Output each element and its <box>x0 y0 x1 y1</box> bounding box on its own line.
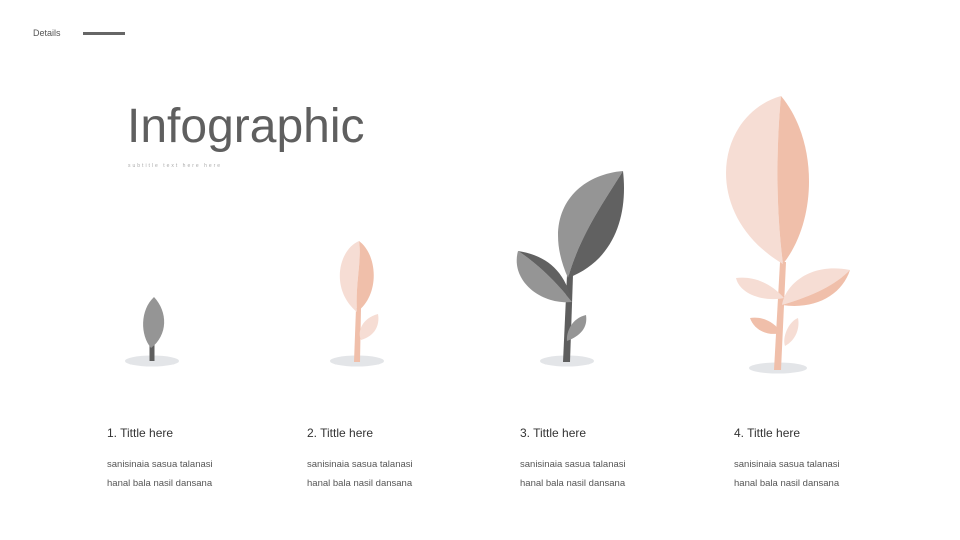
item 4: hanal bala nasil dansana <box>734 478 839 489</box>
item 2: hanal bala nasil dansana <box>307 478 412 489</box>
item 2: sanisinaia sasua talanasi <box>307 459 413 470</box>
header bar <box>83 32 125 35</box>
header label: Details <box>33 28 61 38</box>
item 3: sanisinaia sasua talanasi <box>520 459 626 470</box>
item 1: sanisinaia sasua talanasi <box>107 459 213 470</box>
item 4: sanisinaia sasua talanasi <box>734 459 840 470</box>
plant 1 <box>125 297 179 366</box>
item 1 <box>107 426 213 489</box>
item 4: 4. Tittle here <box>734 426 800 440</box>
plant 2 <box>330 241 384 366</box>
title: Infographic <box>127 100 364 153</box>
item 4 <box>734 426 840 489</box>
plant 4 <box>726 96 850 374</box>
item 1: hanal bala nasil dansana <box>107 478 212 489</box>
subtitle: subtitle text here here <box>128 163 222 169</box>
item 1: 1. Tittle here <box>107 426 173 440</box>
plant 3 <box>517 171 624 366</box>
item 3: 3. Tittle here <box>520 426 586 440</box>
item 3 <box>520 426 626 489</box>
item 2: 2. Tittle here <box>307 426 373 440</box>
item 2 <box>307 426 413 489</box>
item 3: hanal bala nasil dansana <box>520 478 625 489</box>
